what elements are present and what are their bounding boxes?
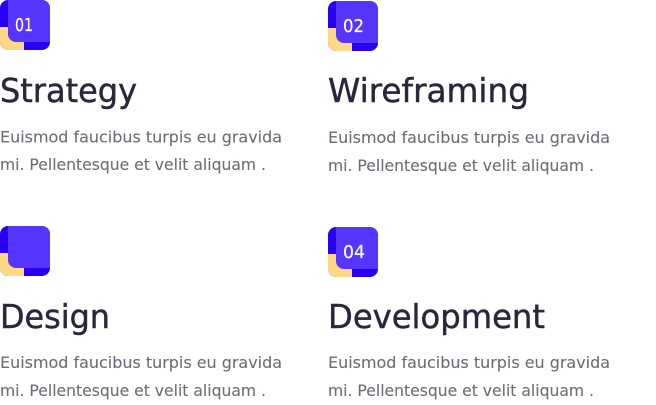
icon: badge 02: 02: [343, 16, 364, 37]
icon: blank badge: [0, 226, 50, 276]
text block: strategy description: Euismod faucibus turpis eu gravida: [0, 128, 282, 146]
text block: development description: [328, 353, 610, 400]
text block: strategy description: mi. Pellentesque et velit aliquam .: [0, 155, 266, 174]
icon: badge 02: [328, 1, 378, 51]
icon: badge 01: 01: [15, 15, 33, 36]
icon: badge 04: 04: [343, 242, 365, 263]
heading: strategy: Strategy: [0, 71, 137, 110]
text block: design description: [0, 353, 282, 400]
text block: wireframing description: [328, 128, 610, 175]
text block: strategy description: [0, 128, 282, 174]
text block: wireframing description: Euismod faucibus turpis eu gravida: [328, 128, 610, 147]
text block: design description: mi. Pellentesque et velit aliquam .: [0, 381, 266, 400]
text block: development description: Euismod faucibus turpis eu gravida: [328, 353, 610, 372]
icon: badge 04: [328, 227, 378, 277]
heading: design: Design: [0, 297, 110, 336]
text block: design description: Euismod faucibus turpis eu gravida: [0, 353, 282, 372]
heading: wireframing: Wireframing: [328, 71, 529, 110]
panel: strategy: [0, 0, 282, 174]
panel: design: [0, 226, 282, 400]
panel: wireframing: [328, 1, 610, 175]
icon: badge 01: [0, 0, 50, 50]
panel: development: [328, 227, 610, 400]
text block: development description: mi. Pellentesque et velit aliquam .: [328, 381, 594, 400]
text block: wireframing description: mi. Pellentesque et velit aliquam .: [328, 156, 594, 175]
heading: development: Development: [328, 297, 545, 336]
